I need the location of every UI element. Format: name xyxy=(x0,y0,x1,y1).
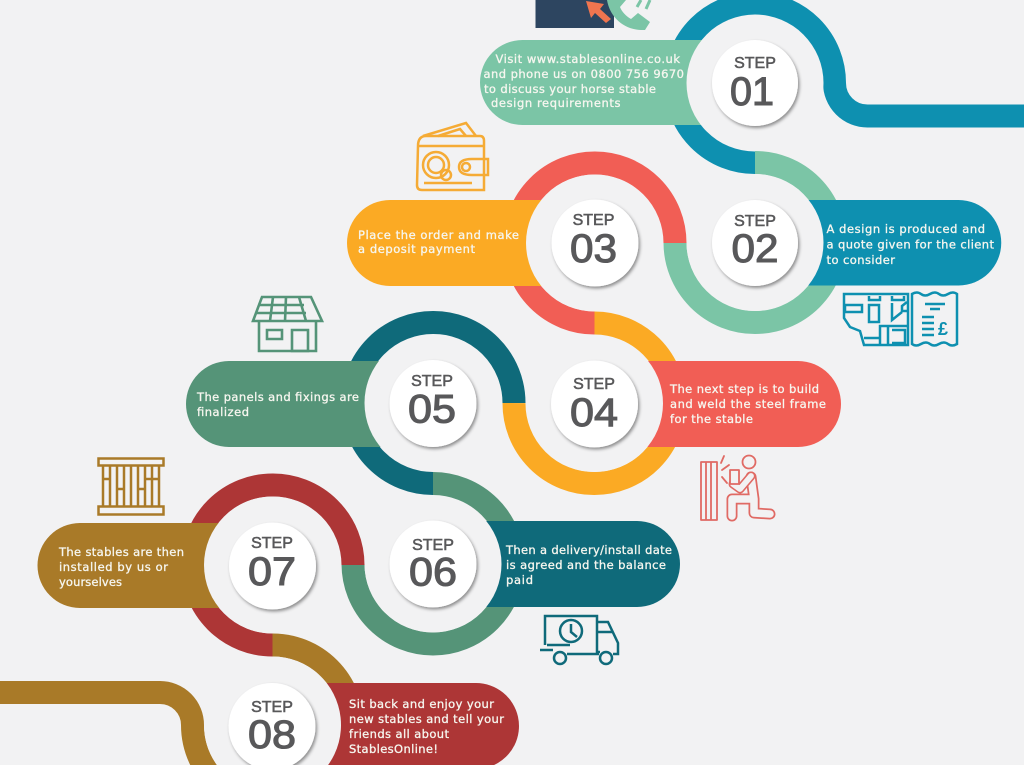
step 05 text pill xyxy=(186,361,385,447)
step 08 description: new stables and tell your xyxy=(349,712,504,726)
step 01 text pill xyxy=(480,40,705,125)
step 06 description: Then a delivery/install date xyxy=(505,543,672,557)
step 02 ring xyxy=(675,162,835,322)
step 05 badge: STEP xyxy=(411,373,453,390)
step 03 ring xyxy=(515,163,675,323)
step 08 badge: 08 xyxy=(248,713,296,757)
step 07 description: installed by us or xyxy=(59,560,168,574)
step 08 panel xyxy=(0,645,519,765)
step 08 description xyxy=(349,697,504,756)
step 03 text pill xyxy=(347,200,545,286)
step 01 description: Visit www.stablesonline.co.uk xyxy=(496,52,680,66)
step 05 ring xyxy=(352,322,514,484)
step 03 badge xyxy=(552,200,638,286)
icon: stable gate xyxy=(98,458,164,514)
step 01 badge: 01 xyxy=(730,70,774,114)
step 04 badge xyxy=(551,360,638,448)
step 02 text pill xyxy=(805,200,1001,286)
step 04 ring xyxy=(514,323,675,484)
step 03 description: Place the order and make xyxy=(358,228,519,242)
step 03 circle cutout xyxy=(526,174,663,312)
step 07 circle cutout xyxy=(204,496,341,634)
step 04 description: and weld the steel frame xyxy=(670,397,826,411)
step 02 description xyxy=(826,222,994,267)
step 07 description xyxy=(58,545,184,589)
step 08 description: StablesOnline! xyxy=(349,742,438,756)
step 05 description xyxy=(196,390,359,419)
step 08 badge xyxy=(229,683,316,765)
step 08 badge: STEP xyxy=(251,699,293,716)
step 04 description: for the stable xyxy=(670,412,753,426)
step 06 panel xyxy=(353,484,680,664)
step 01 description: to discuss your horse stable xyxy=(484,82,656,96)
step 01 panel xyxy=(480,0,1024,162)
step 08 description: friends all about xyxy=(349,727,449,741)
step 02 panel xyxy=(675,162,1001,346)
step 07 description: The stables are then xyxy=(58,545,184,559)
step 07 text pill xyxy=(38,523,223,608)
step 02 description: A design is produced and xyxy=(826,222,985,236)
step 04 badge: 04 xyxy=(570,391,618,435)
step 04 description xyxy=(669,382,826,426)
step 06 badge: 06 xyxy=(409,550,457,594)
step 02 description: a quote given for the client xyxy=(826,238,994,252)
step 04 badge: STEP xyxy=(573,376,615,393)
step 06 badge: STEP xyxy=(412,537,454,554)
step 03 description: a deposit payment xyxy=(358,242,475,256)
step 03 badge: STEP xyxy=(573,212,614,229)
step 01 description: and phone us on 0800 756 9670 xyxy=(484,67,684,81)
step 05 panel xyxy=(186,297,514,484)
step 01 description: design requirements xyxy=(491,96,620,110)
step 07 panel xyxy=(38,458,353,645)
step 01 description xyxy=(484,52,684,110)
step 06 text pill xyxy=(483,521,680,607)
step 01 circle cutout xyxy=(686,14,824,152)
icon: computer screen and phone xyxy=(536,0,650,30)
icon: house with solar panels xyxy=(253,297,322,351)
step 05 description: The panels and fixings are xyxy=(196,390,359,404)
step 08 description: Sit back and enjoy your xyxy=(349,697,494,711)
step 07 ring xyxy=(192,485,353,645)
step 02 badge: 02 xyxy=(732,227,778,271)
step 05 circle cutout xyxy=(364,334,502,472)
icon: quote receipt: £ xyxy=(938,319,948,339)
step 06 badge xyxy=(390,520,476,608)
step 01 ring xyxy=(675,3,1024,162)
step 05 badge xyxy=(390,360,476,447)
step 06 description: paid xyxy=(506,573,533,587)
step 08 ring and exit path xyxy=(0,645,352,765)
step 08 circle cutout xyxy=(204,656,341,765)
step 01 badge xyxy=(712,40,798,126)
step 05 description: finalized xyxy=(197,405,249,419)
step 08 text pill xyxy=(322,683,519,765)
icon: floor plan xyxy=(844,294,908,345)
step 04 description: The next step is to build xyxy=(669,382,819,396)
step 02 badge: STEP xyxy=(734,213,776,230)
step 05 badge: 05 xyxy=(408,388,456,432)
step 07 badge: STEP xyxy=(251,535,293,552)
step 04 text pill xyxy=(645,361,841,447)
step 02 badge xyxy=(712,200,798,286)
step 06 ring xyxy=(353,484,513,644)
icon: delivery truck with clock xyxy=(540,616,618,664)
step 07 badge xyxy=(229,522,316,610)
step 07 badge: 07 xyxy=(248,550,296,594)
step 04 panel xyxy=(514,323,841,520)
step 01 badge: STEP xyxy=(734,55,776,72)
step 02 description: to consider xyxy=(826,253,895,267)
step 06 description xyxy=(505,543,672,587)
icon: wallet with money xyxy=(417,123,488,190)
step 03 badge: 03 xyxy=(570,227,617,271)
step 03 description xyxy=(358,228,519,256)
step 06 circle cutout xyxy=(364,496,502,632)
step 03 panel xyxy=(347,123,675,323)
icon: welder at steel frame xyxy=(701,456,770,520)
step 02 circle cutout xyxy=(686,174,824,311)
step 07 description: yourselves xyxy=(59,575,122,589)
icon: quote receipt xyxy=(912,292,957,346)
step 04 circle cutout xyxy=(526,335,663,472)
step 06 description: is agreed and the balance xyxy=(506,558,666,572)
